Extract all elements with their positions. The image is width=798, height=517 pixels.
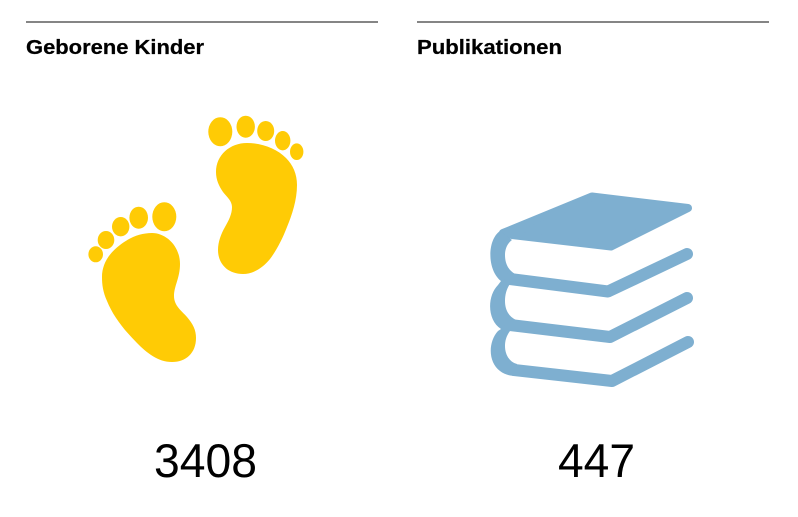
heading: Publikationen: Publikationen [417,36,562,59]
icon: baby footprints [88,116,303,362]
icon: stack of books [490,196,688,376]
panel: Publikationen [417,36,688,487]
number: 447: 447 [558,434,635,487]
panel: geborene Kinder [26,36,303,487]
heading: Geborene Kinder: Geborene Kinder [26,36,204,59]
number: 3408: 3408 [154,434,257,487]
